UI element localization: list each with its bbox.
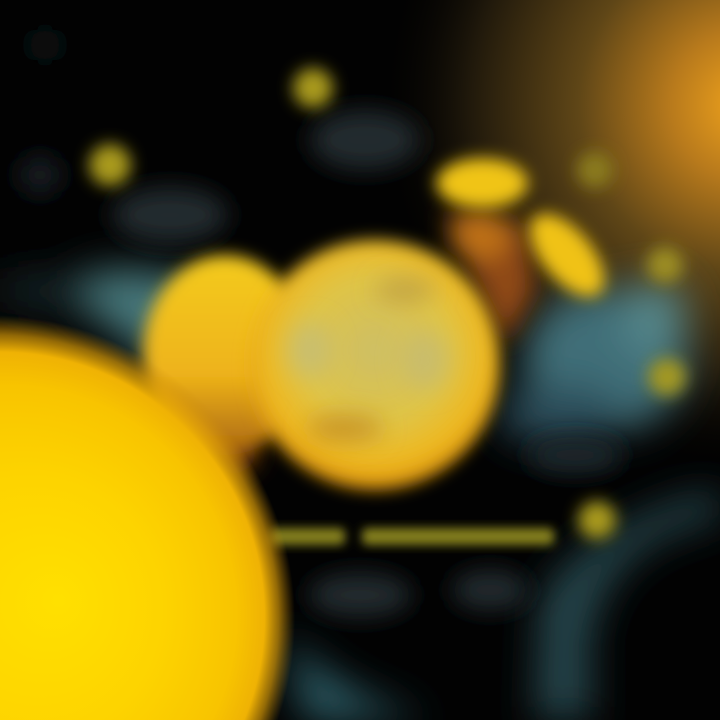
left crescent coin xyxy=(143,255,307,455)
dark background blobs xyxy=(18,29,623,617)
top coin xyxy=(436,158,528,208)
main coin xyxy=(250,240,500,490)
large yellow sphere xyxy=(0,290,320,720)
tilted coin xyxy=(516,201,618,309)
coin face detail xyxy=(288,278,449,441)
teal swirl xyxy=(0,270,720,720)
hand or stem behind coins xyxy=(195,210,535,482)
glowing yellow dots xyxy=(89,68,686,539)
orange glow xyxy=(0,0,720,470)
yellow heading bar xyxy=(270,528,554,545)
